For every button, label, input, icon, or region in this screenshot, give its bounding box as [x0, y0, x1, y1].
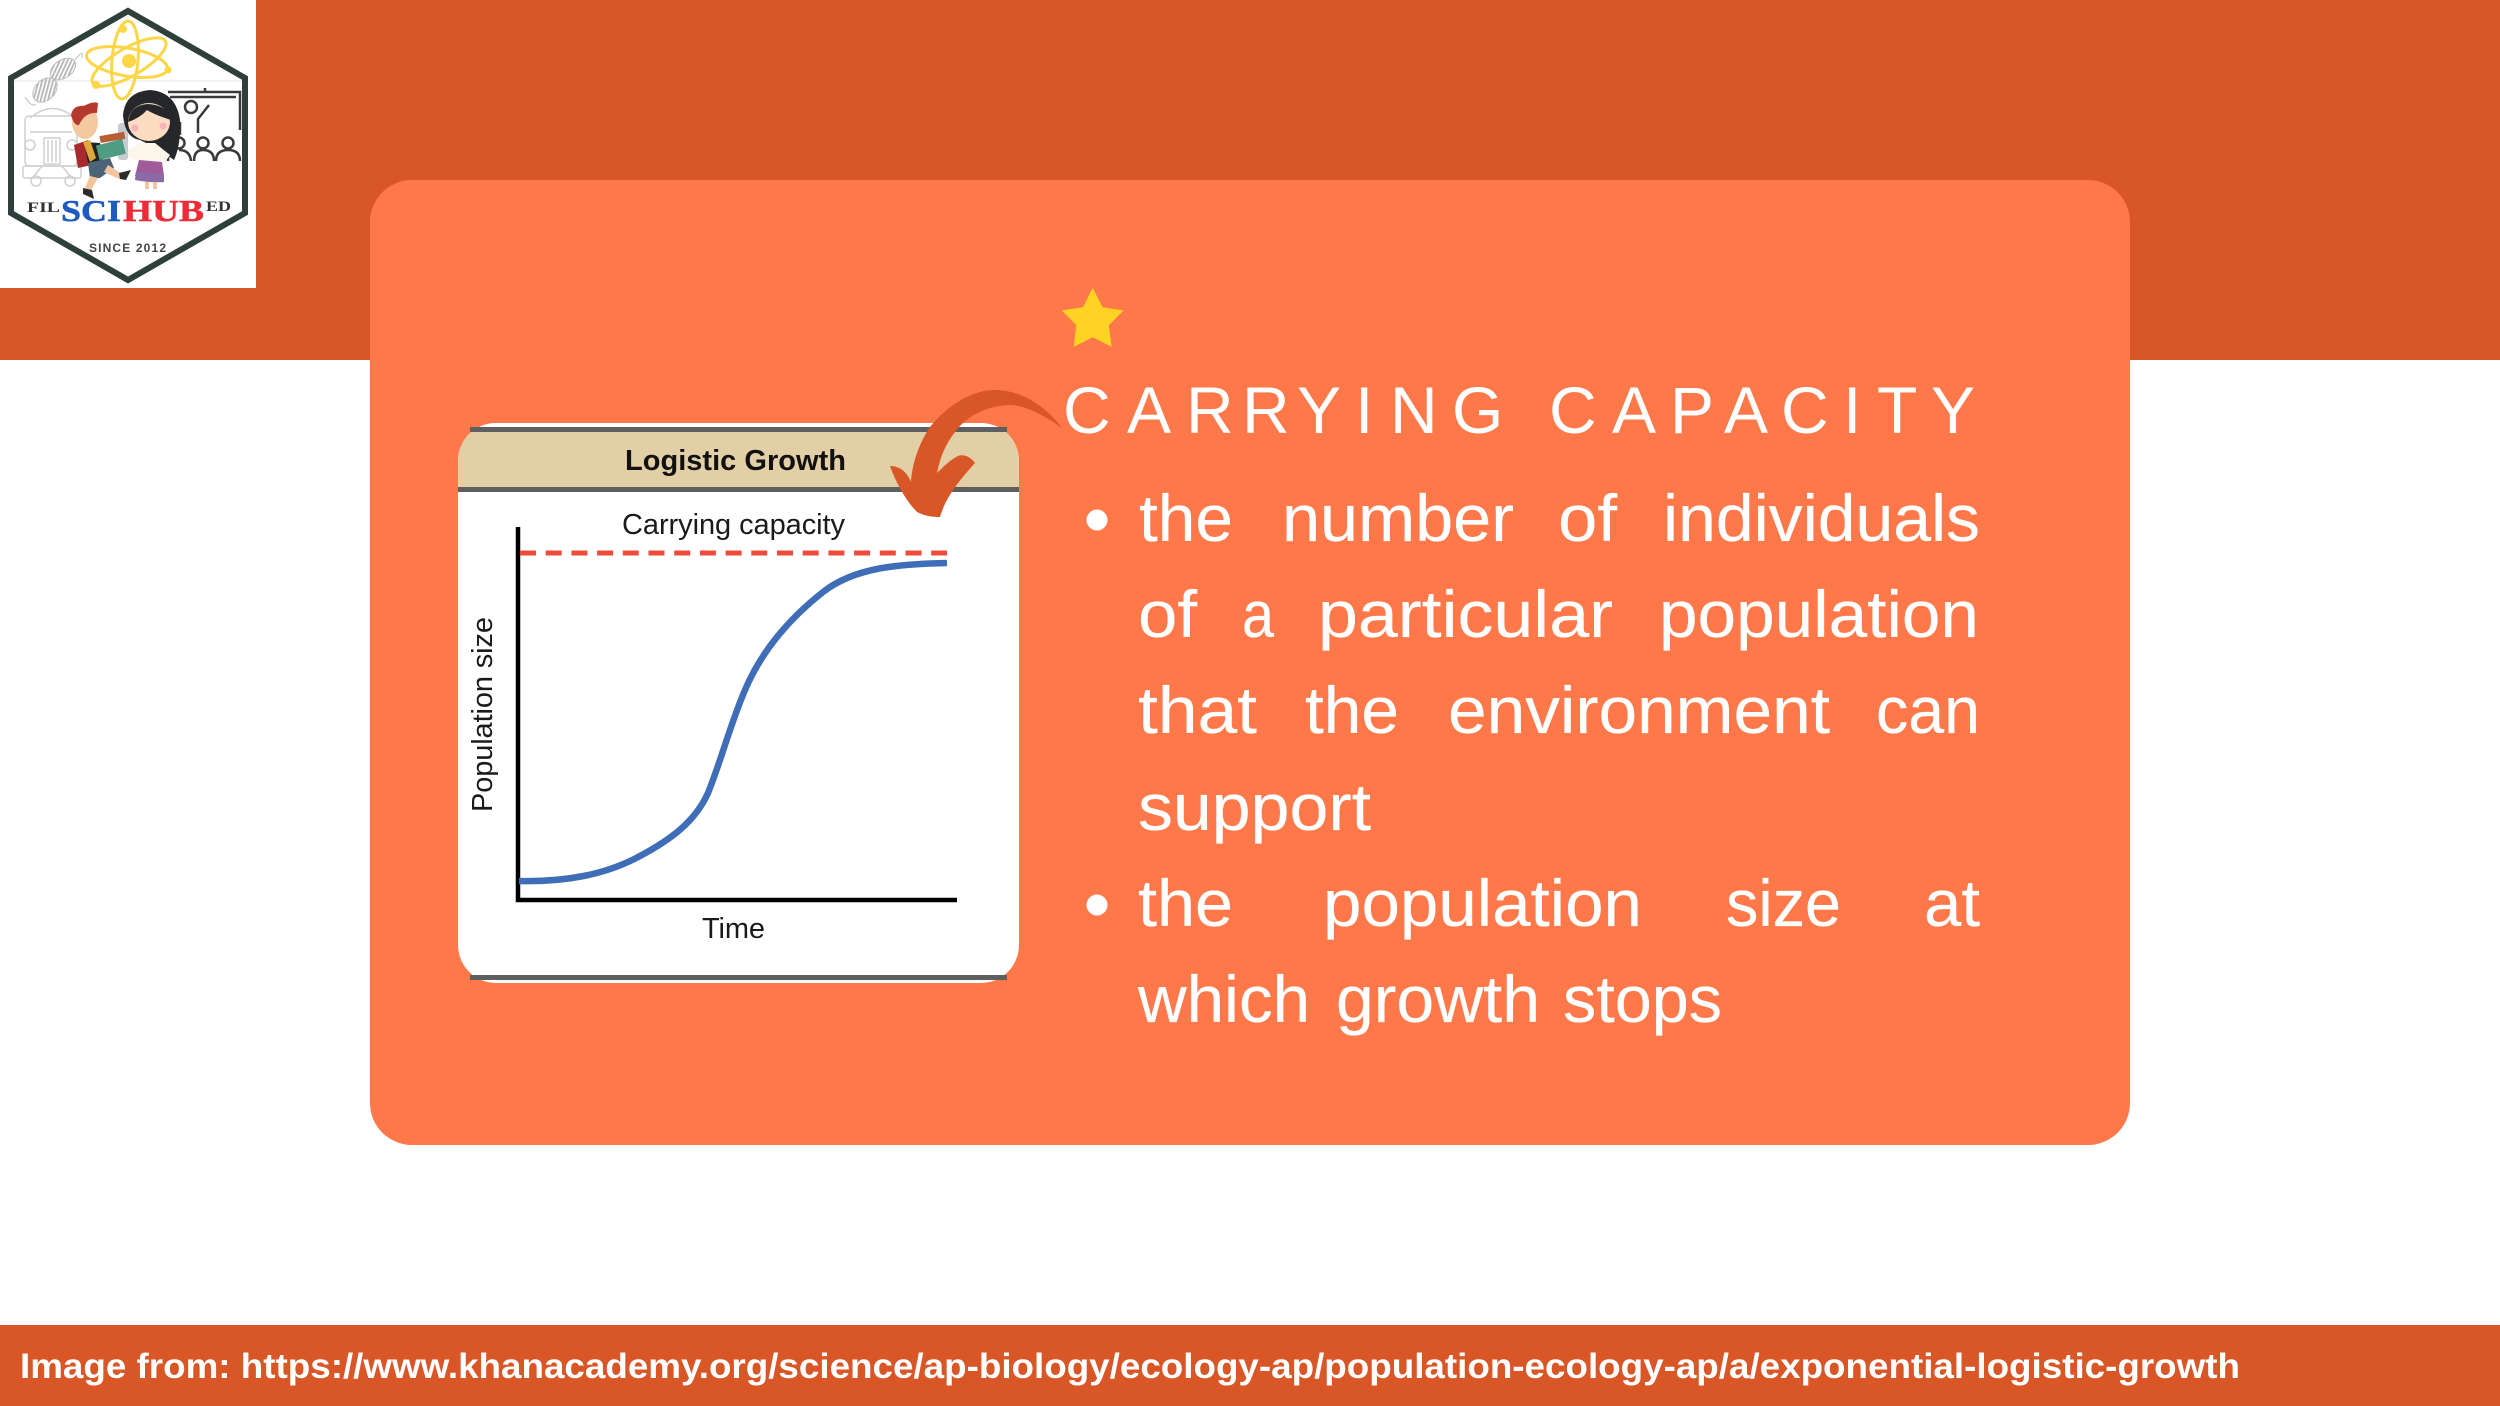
icon: DNA strand	[25, 53, 82, 107]
icon: girl in Filipiniana	[123, 90, 180, 189]
icon: jeepney outline	[23, 108, 81, 186]
logo: FilSciHub Ed hexagon badge: SINCE 2012	[89, 241, 166, 255]
logo: FilSciHub Ed hexagon badge	[0, 0, 256, 288]
logo: FilSciHub Ed hexagon badge: HUB	[123, 193, 204, 228]
top header band	[0, 0, 2500, 360]
text block: definition one: a	[1242, 577, 1274, 651]
carrying capacity label: Carrying capacity	[622, 509, 846, 541]
text block: definition one: population	[1659, 577, 1979, 651]
logo: FilSciHub Ed hexagon badge: FIL	[27, 200, 60, 216]
icon: atom	[84, 20, 172, 100]
text block: definition one	[1086, 481, 1980, 844]
icon: curved arrow pointing to the chart	[890, 390, 1062, 517]
text block: definition two: growth	[1336, 962, 1540, 1036]
text block: definition one: can	[1876, 673, 1980, 747]
text block: definition two: size	[1726, 866, 1841, 940]
text block: definition two: stops	[1563, 962, 1722, 1036]
text block: definition one: particular	[1318, 577, 1613, 651]
icon: yellow star	[1063, 289, 1123, 346]
text block: definition one: environment	[1448, 673, 1830, 747]
text block: definition one: that	[1138, 673, 1257, 747]
chart title: Logistic Growth	[625, 445, 846, 477]
text block: definition one: number	[1282, 481, 1514, 555]
footer band with image source: Image from: https://www.khanacademy.org/science/ap-biology/ecology-ap/population-ecology-ap/a/exponential-logistic-growth	[20, 1347, 2240, 1386]
text block: definition one: the	[1139, 481, 1233, 555]
carrying capacity dashed line	[520, 550, 947, 556]
logo: FilSciHub Ed hexagon badge: ED	[206, 199, 231, 215]
axes	[518, 527, 957, 900]
text block: definition two: population	[1323, 866, 1642, 940]
logistic growth curve	[519, 563, 947, 881]
text block: definition one: of	[1558, 481, 1618, 555]
heading: carrying capacity: CARRYING CAPACITY	[1063, 373, 1975, 447]
footer band with image source	[0, 1325, 2500, 1406]
text block: definition two: at	[1924, 866, 1980, 940]
text block: definition one: the	[1305, 673, 1399, 747]
x axis label: Time	[702, 913, 765, 945]
text block: definition one: of	[1138, 577, 1198, 651]
chart: logistic growth graph	[458, 423, 1019, 983]
text block: definition two	[1086, 866, 1980, 1036]
icon: boy with books	[71, 102, 131, 199]
text block: definition two: which	[1137, 962, 1310, 1036]
text block: definition one: individuals	[1663, 481, 1980, 555]
logo: FilSciHub Ed hexagon badge: SCI	[61, 193, 121, 228]
icon: teacher and classroom	[168, 88, 240, 161]
text block: definition one: support	[1138, 770, 1371, 844]
y axis label: Population size	[467, 617, 499, 812]
text block: definition two: the	[1138, 866, 1233, 940]
panel: main orange card	[370, 180, 2130, 1145]
